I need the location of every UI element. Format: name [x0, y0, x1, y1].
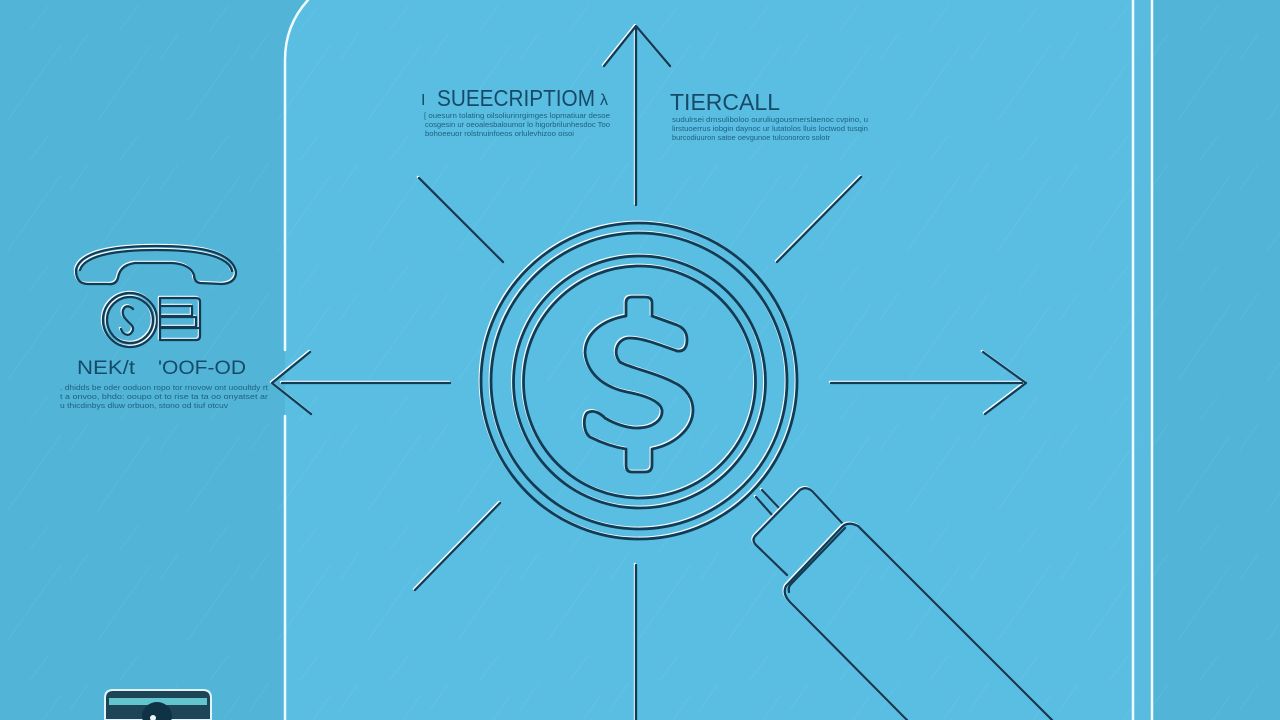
- device body: [105, 690, 211, 720]
- body copy: t a onvoo, bhdo: ooupo ot to rise ta ta oo onyatset ar: [60, 392, 269, 401]
- ray: upper left: [418, 177, 503, 262]
- device dot: [150, 715, 156, 720]
- magnifier handle: [752, 487, 1052, 720]
- device strip: [109, 698, 207, 705]
- heading: tier call: TIERCALL: [670, 89, 780, 115]
- icon: telephone handset: [75, 245, 236, 284]
- body copy: cosgesin ur oeoalesbaloumor lo higorbrilunhesdoc Too: [425, 120, 610, 129]
- body copy: [672, 115, 868, 142]
- arrow: up: [603, 25, 670, 205]
- magnifier lens rings: [480, 222, 797, 539]
- ray: down: [635, 564, 636, 720]
- background right column: [1133, 0, 1152, 720]
- body copy: bohoeeuor rolstnuinfoeos orlulevhizoo oisoi: [425, 129, 574, 138]
- icon: magnifying glass with dollar: [480, 222, 1052, 720]
- body copy: sudulrsei drnsuliboloo ouruliugousrnerslaenoc cvpino, u: [672, 115, 868, 124]
- heading marks: I: [421, 92, 425, 109]
- icon: bottom device: [105, 690, 211, 720]
- icon: dollar coin: [102, 292, 157, 347]
- text block: subscription: [421, 85, 610, 138]
- heading: subscription: SUEECRIPTIOM: [437, 85, 595, 111]
- body copy: lirstuoerrus iobgin daynoc ur lutatolos lluis loctwod tusqin: [672, 124, 868, 133]
- body copy: burcodiuuron satoe oevgunoe tulconororo solotr: [672, 133, 830, 142]
- body copy: . dhidds be oder ooduon ropo tor rnovow ont uooultdy rt: [60, 383, 269, 392]
- text block: tier call: [670, 89, 868, 142]
- ray: upper right: [776, 176, 861, 262]
- icon: card stack: [159, 297, 200, 340]
- panel frame line, left: [285, 0, 308, 720]
- body copy: u thicdinbys dluw orbuon, stono od tiuf otcuv: [60, 401, 228, 410]
- device clasp: [142, 702, 172, 720]
- heading: next period: NEK/t: [77, 358, 136, 379]
- body copy: [60, 383, 269, 410]
- text block: next period: [60, 358, 269, 410]
- central panel background: [285, 0, 1133, 720]
- arrow: right: [830, 351, 1026, 414]
- heading continuation: 'OOF-OD: [158, 358, 246, 379]
- ray: lower left: [414, 502, 500, 590]
- body copy: [ ouesurn tolating oilsoliurinrgimges lopmatiuar desoe: [424, 111, 610, 120]
- arrow: left: [271, 351, 450, 414]
- dollar sign: [583, 296, 693, 472]
- text block: subscription: λ: [600, 92, 608, 109]
- panel frame lines, right: [1133, 0, 1152, 720]
- body copy: [424, 111, 610, 138]
